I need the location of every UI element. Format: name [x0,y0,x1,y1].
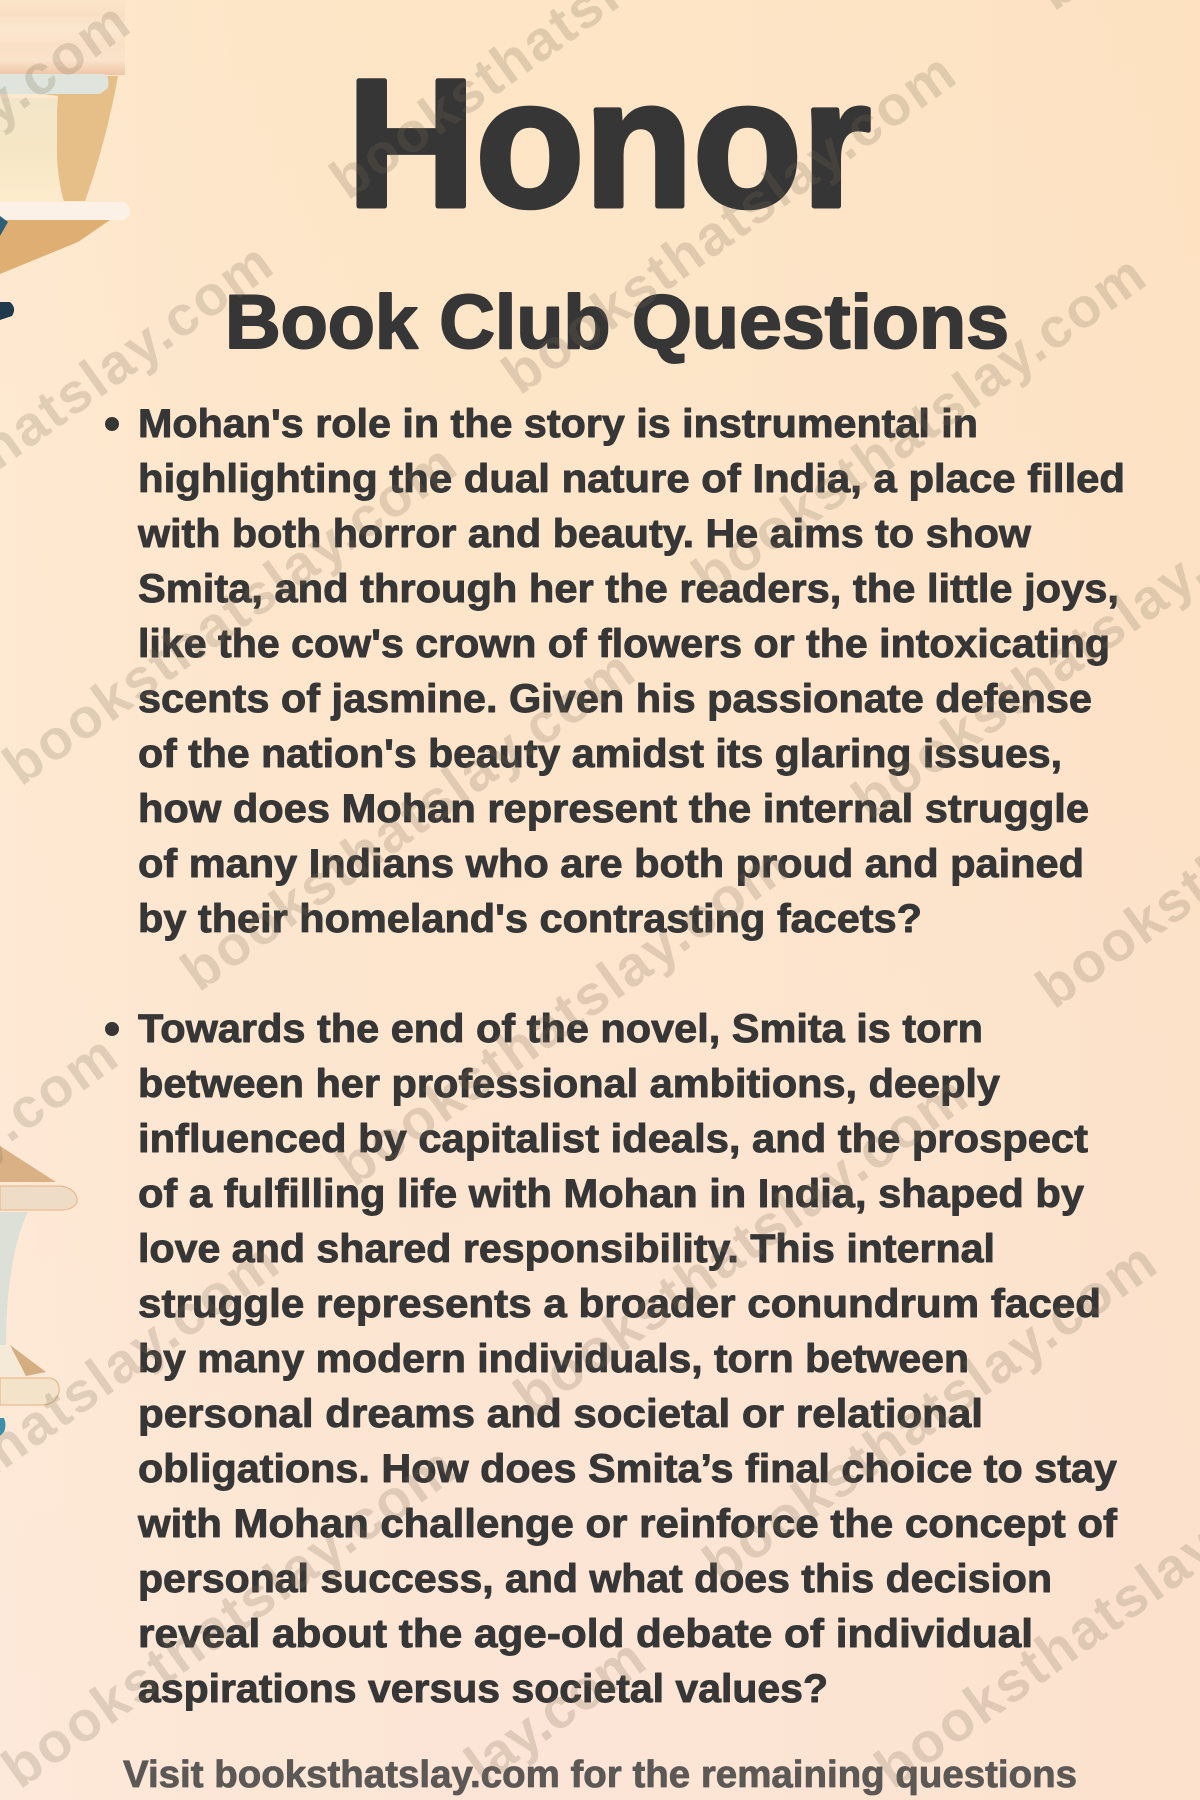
question 2: Towards the end of the novel, Smita is torn [138,1007,983,1051]
question 2 [105,1007,1118,1711]
illustration: top-left stack of books [0,0,130,320]
question 2: struggle represents a broader conundrum faced [138,1282,1101,1326]
watermarks: booksthatslay.com [490,40,966,406]
question 2: with Mohan challenge or reinforce the concept of [137,1502,1118,1546]
watermarks: lay.com [453,1626,656,1796]
question 1: how does Mohan represent the internal struggle [138,787,1089,831]
watermarks: booksthatslay.com [0,1434,466,1800]
question 1: Mohan's role in the story is instrumental in [138,402,978,446]
watermarks: booksthatslay.com [502,1062,978,1428]
question 2: personal dreams and societal or relational [138,1392,983,1436]
question 2: of a fulfilling life with Mohan in India, shaped by [138,1172,1085,1216]
subtitle: Book Club Questions [225,280,1009,365]
question 1 [105,402,1125,941]
question 2: love and shared responsibility. This internal [138,1227,995,1271]
question 2: reveal about the age-old debate of individual [138,1612,1033,1656]
question 2: by many modern individuals, torn between [138,1337,969,1381]
question 1: Smita, and through her the readers, the little joys, [138,567,1119,611]
question 2: influenced by capitalist ideals, and the prospect [138,1117,1088,1161]
question 1: of the nation's beauty amidst its glaring issues, [138,732,1062,776]
question 2: personal success, and what does this decision [138,1557,1052,1601]
title: Honor [347,41,871,245]
watermarks: booksthatslay.com [169,637,645,1003]
watermarks: booksthatslay.com [691,1229,1167,1595]
question 1: of many Indians who are both proud and pained [138,842,1084,886]
watermarks: booksthatslay.com [0,431,467,797]
question 1: highlighting the dual nature of India, a place filled [138,457,1125,501]
question 2: aspirations versus societal values? [138,1667,828,1711]
watermarks: booksthatslay.com [324,832,800,1198]
question 1: like the cow's crown of flowers or the intoxicating [138,622,1110,666]
question 2: obligations. How does Smita’s final choice to stay [138,1447,1118,1491]
watermarks: booksthatslay.com [680,242,1156,608]
illustration: lower-left stack of books [0,1146,77,1436]
question 2: between her professional ambitions, deeply [138,1062,1001,1106]
question 1: scents of jasmine. Given his passionate defense [138,677,1092,721]
question 1: with both horror and beauty. He aims to show [137,512,1032,556]
footer link: Visit booksthatslay.com for the remaining questions [123,1754,1077,1796]
question 1: by their homeland's contrasting facets? [138,897,922,941]
